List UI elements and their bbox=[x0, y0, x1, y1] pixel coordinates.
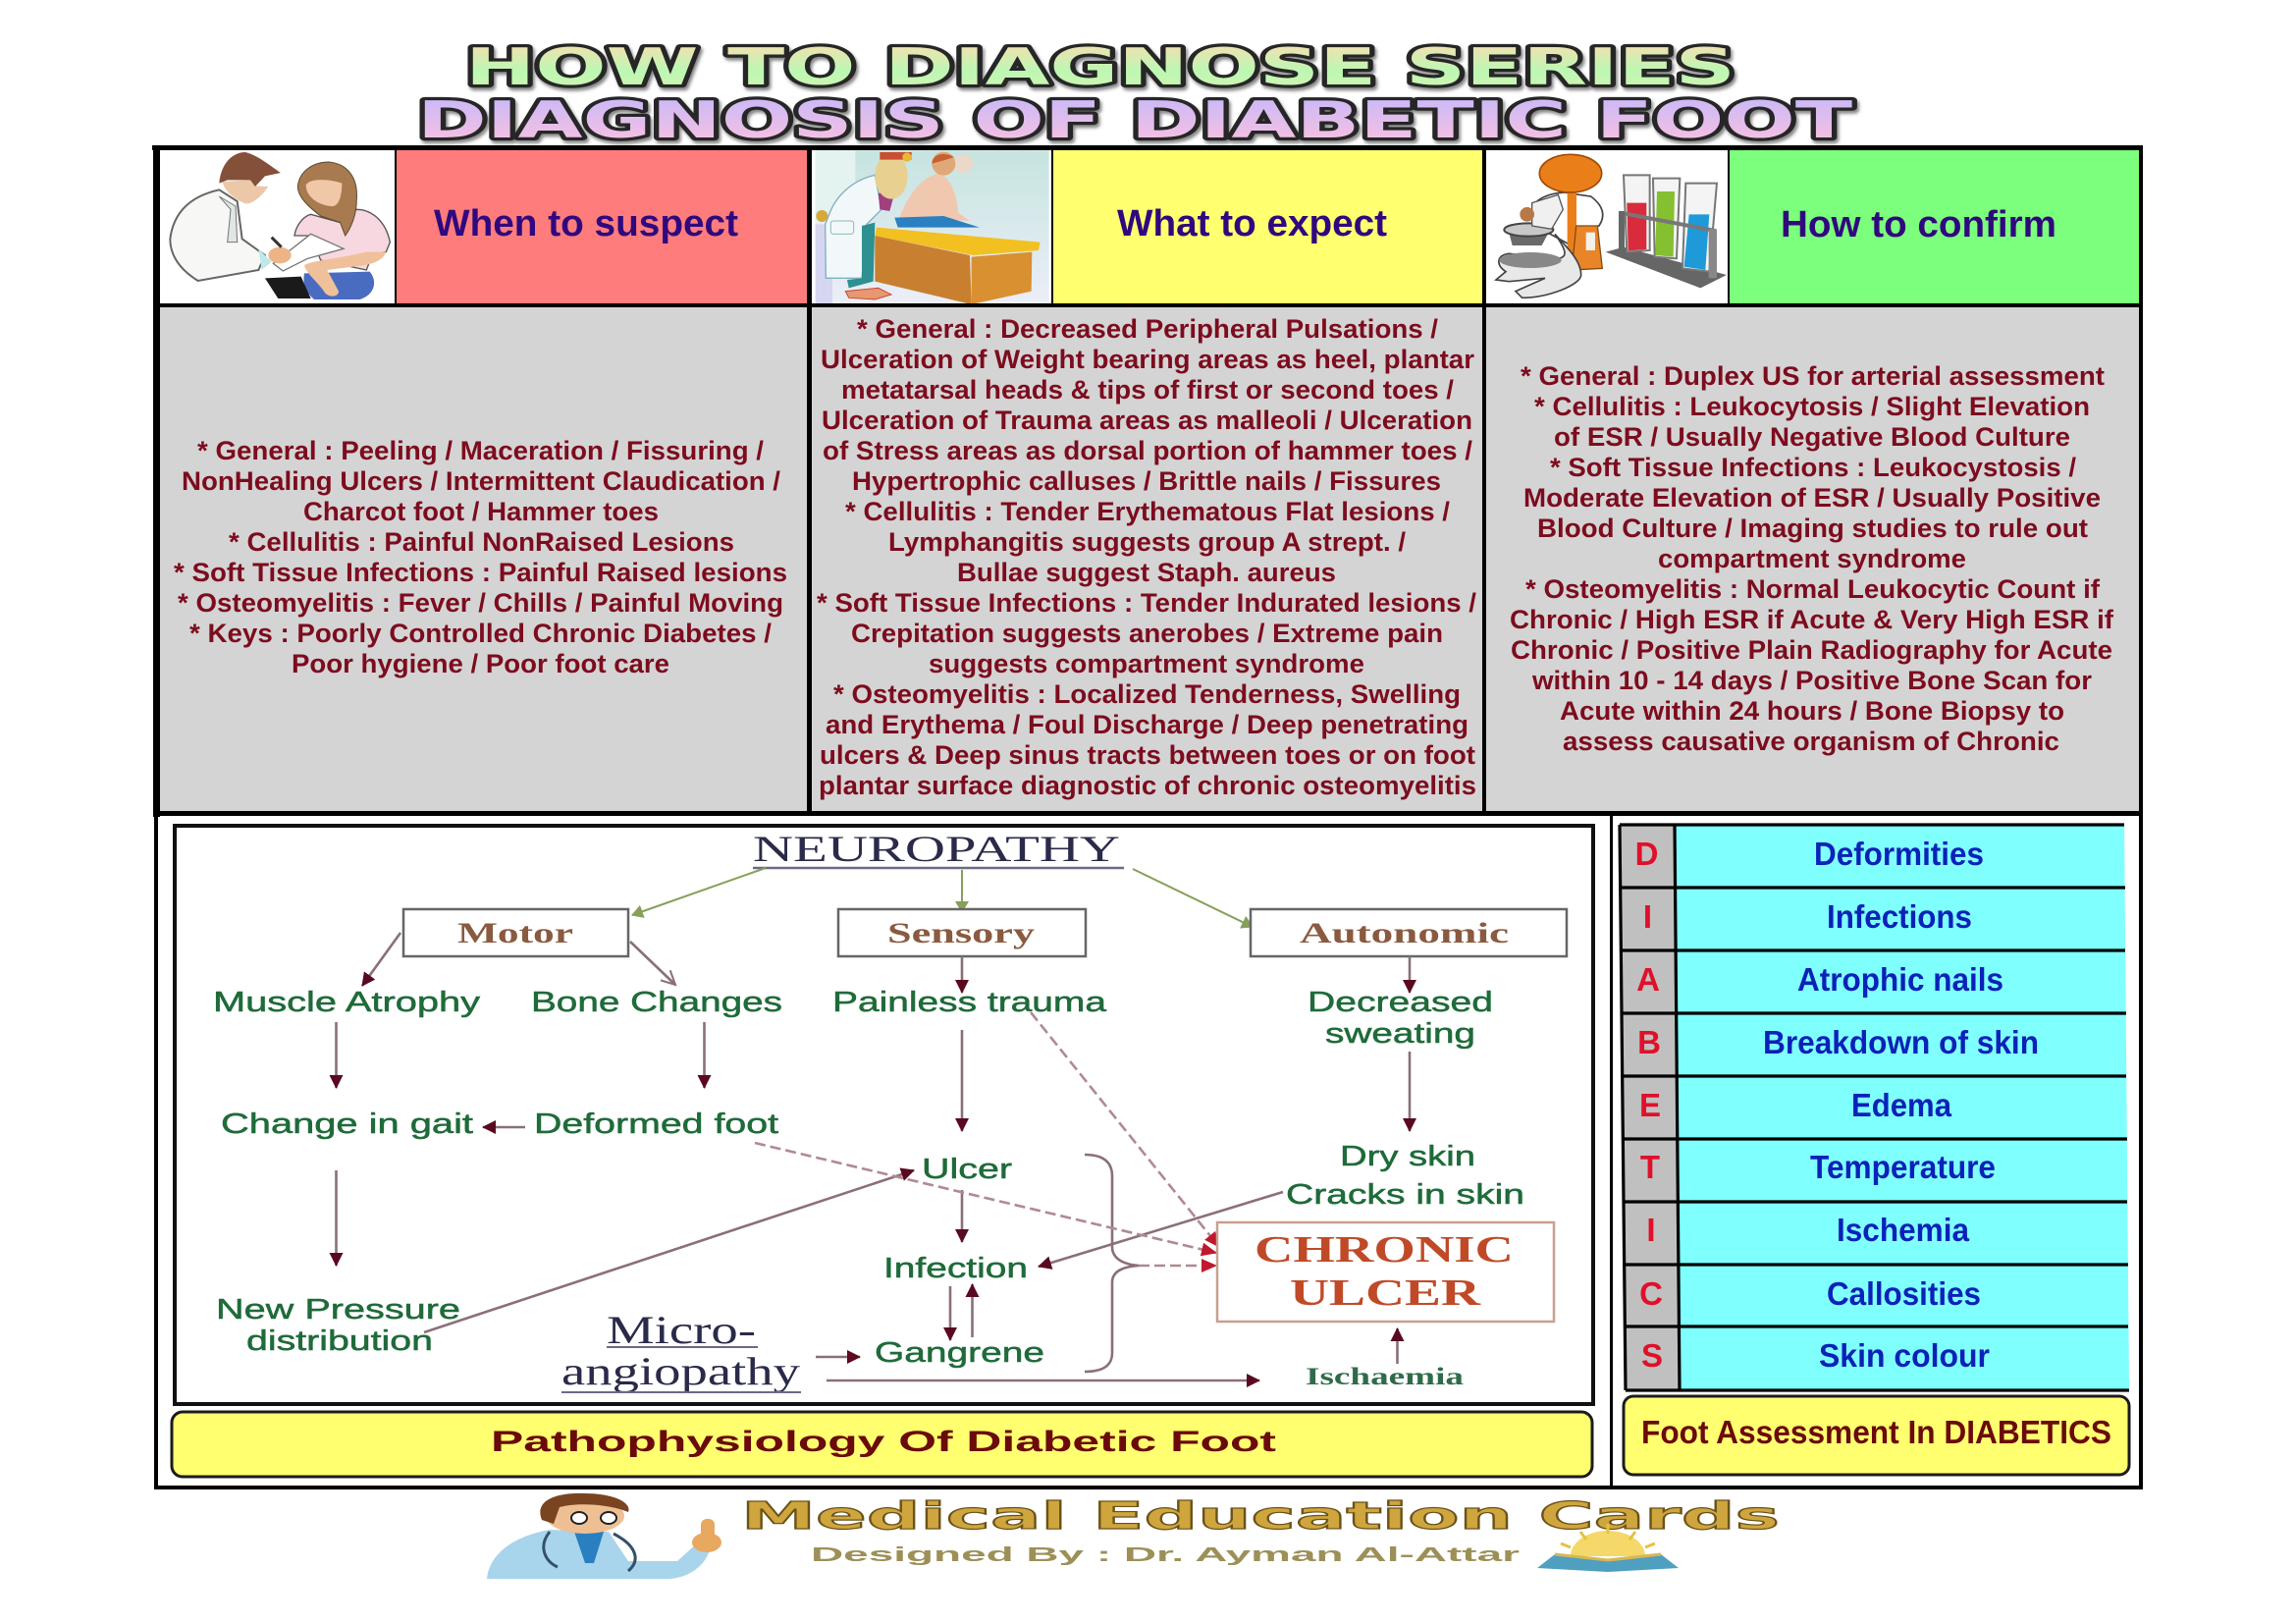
row: A atrophic nails: Atrophic nails bbox=[1797, 961, 2003, 998]
dashed arrows to chronic ulcer bbox=[755, 1012, 1219, 1266]
flow labels: Dry skin bbox=[1340, 1141, 1475, 1172]
flow labels: New Pressure bbox=[216, 1294, 460, 1325]
box: chronic ulcer: ULCER bbox=[1290, 1272, 1481, 1314]
text: how to confirm details: within 10 - 14 days / Positive Bone Scan for bbox=[1531, 666, 2092, 695]
text: what to expect details: plantar surface diagnostic of chronic osteomyelitis bbox=[819, 771, 1476, 800]
text: what to expect details: * General : Decreased Peripheral Pulsations / bbox=[857, 314, 1439, 344]
text: how to confirm details: Chronic / High ESR if Acute & Very High ESR if bbox=[1510, 605, 2113, 634]
caption: pathophysiology of diabetic foot: Pathophysiology Of Diabetic Foot bbox=[491, 1426, 1276, 1458]
text: when to suspect details: * Soft Tissue Infections : Painful Raised lesions bbox=[174, 558, 787, 587]
row: B breakdown of skin bbox=[1637, 1024, 2039, 1060]
row: D deformities: Deformities bbox=[1814, 836, 1984, 872]
text: when to suspect details: * Osteomyelitis : Fever / Chills / Painful Moving bbox=[178, 588, 783, 618]
text: what to expect details: and Erythema / Foul Discharge / Deep penetrating bbox=[826, 710, 1468, 739]
text: how to confirm details: * General : Duplex US for arterial assessment bbox=[1521, 361, 2105, 391]
panel: what to expect header bbox=[1053, 148, 1483, 305]
text: how to confirm details: Blood Culture / Imaging studies to rule out bbox=[1537, 514, 2088, 543]
row: D deformities bbox=[1635, 836, 1984, 872]
panel: diabetics mnemonic table bbox=[1620, 825, 2129, 1390]
panel: when to suspect header bbox=[397, 148, 808, 305]
flow labels: Painless trauma bbox=[832, 987, 1107, 1018]
text: when to suspect details: NonHealing Ulcers / Intermittent Claudication / bbox=[182, 466, 781, 496]
flow arrows bbox=[336, 933, 1410, 1380]
flow labels: Infection bbox=[883, 1253, 1028, 1284]
icon: scientist with microscope and test tubes bbox=[1489, 150, 1728, 304]
row: E edema: E bbox=[1639, 1087, 1661, 1123]
icon: doctor with patient bbox=[160, 150, 395, 303]
flow labels bbox=[213, 987, 1524, 1369]
table frame bbox=[152, 145, 2143, 1489]
flow labels: Decreased bbox=[1308, 987, 1493, 1018]
text: how to confirm details: Chronic / Positive Plain Radiography for Acute bbox=[1511, 635, 2112, 665]
row: S skin colour: Skin colour bbox=[1819, 1337, 1990, 1374]
box: autonomic bbox=[1251, 909, 1567, 956]
panel: how to confirm body bbox=[1486, 307, 2140, 811]
caption: pathophysiology of diabetic foot bbox=[172, 1412, 1592, 1477]
text: what to expect details: Hypertrophic calluses / Brittle nails / Fissures bbox=[852, 466, 1441, 496]
row: C callosities bbox=[1639, 1275, 1981, 1312]
text: how to confirm details: * Soft Tissue Infections : Leukocystosis / bbox=[1550, 453, 2077, 482]
text: when to suspect details: * Keys : Poorly Controlled Chronic Diabetes / bbox=[189, 619, 773, 648]
flow labels: Bone Changes bbox=[531, 987, 782, 1018]
icon: doctor examining patient bbox=[816, 150, 1049, 304]
text: when to suspect details: * General : Peeling / Maceration / Fissuring / bbox=[197, 436, 765, 465]
panel: what to expect body bbox=[812, 307, 1483, 811]
heading: neuropathy: NEUROPATHY bbox=[753, 830, 1120, 870]
text: how to confirm details: compartment syndrome bbox=[1658, 544, 1966, 573]
flow labels: Gangrene bbox=[875, 1337, 1044, 1369]
text: how to confirm details: assess causative organism of Chronic bbox=[1563, 727, 2059, 756]
panel: when to suspect body bbox=[160, 307, 808, 811]
title line 2: DIAGNOSIS OF DIABETIC FOOT bbox=[417, 91, 1853, 150]
text: how to confirm details: * Cellulitis : Leukocytosis / Slight Elevation bbox=[1534, 392, 2090, 421]
box: chronic ulcer: CHRONIC bbox=[1255, 1229, 1514, 1271]
icon: open book with sun bbox=[1537, 1524, 1679, 1572]
row: D deformities: D bbox=[1635, 836, 1658, 872]
panel: main table background bbox=[155, 147, 2141, 1487]
text: when to suspect details: Charcot foot / Hammer toes bbox=[303, 497, 659, 526]
row: A atrophic nails: A bbox=[1636, 961, 1660, 998]
box: sensory: Sensory bbox=[887, 917, 1035, 949]
text: how to confirm details: * Osteomyelitis : Normal Leukocytic Count if bbox=[1525, 574, 2100, 604]
row: I infections: Infections bbox=[1827, 898, 1972, 935]
label: microangiopathy: angiopathy bbox=[561, 1349, 800, 1393]
footer brand: medical education cards: Medical Education Cards bbox=[741, 1494, 1780, 1538]
text: what to expect details: ulcers & Deep sinus tracts between toes or on foot bbox=[820, 740, 1475, 770]
flow labels: Deformed foot bbox=[534, 1109, 778, 1140]
row: T temperature bbox=[1640, 1149, 1996, 1185]
text: what to expect details: Ulceration of Weight bearing areas as heel, plantar bbox=[821, 345, 1474, 374]
text: when to suspect details: Poor hygiene / Poor foot care bbox=[292, 649, 669, 678]
box: chronic ulcer bbox=[1217, 1222, 1554, 1322]
flow labels: sweating bbox=[1325, 1018, 1475, 1050]
panel: how to confirm header bbox=[1730, 148, 2140, 305]
caption: foot assessment in diabetics: Foot Assessment In DIABETICS bbox=[1641, 1414, 2111, 1450]
flow labels: distribution bbox=[246, 1325, 433, 1357]
row: B breakdown of skin: Breakdown of skin bbox=[1763, 1024, 2039, 1060]
row: I ischemia: I bbox=[1646, 1212, 1656, 1248]
text: what to expect details: * Osteomyelitis : Localized Tenderness, Swelling bbox=[833, 679, 1461, 709]
text: what to expect details: * Cellulitis : Tender Erythematous Flat lesions / bbox=[845, 497, 1451, 526]
footer credit: designer: Designed By : Dr. Ayman Al-Attar bbox=[811, 1544, 1520, 1566]
row: A atrophic nails bbox=[1636, 961, 2003, 998]
arrows: neuropathy branches bbox=[632, 868, 1253, 927]
text: what to expect details bbox=[817, 314, 1477, 800]
row: B breakdown of skin: B bbox=[1637, 1024, 1661, 1060]
row: T temperature: Temperature bbox=[1810, 1149, 1996, 1185]
icon: cartoon doctor bbox=[487, 1493, 721, 1579]
title bbox=[417, 38, 1853, 150]
label: ischaemia: Ischaemia bbox=[1306, 1364, 1465, 1390]
row: I ischemia bbox=[1646, 1212, 1970, 1248]
flow labels: Change in gait bbox=[221, 1109, 473, 1140]
flow labels: Muscle Atrophy bbox=[213, 987, 481, 1018]
text: what to expect details: Crepitation suggests anerobes / Extreme pain bbox=[851, 619, 1443, 648]
text: how to confirm details: Acute within 24 hours / Bone Biopsy to bbox=[1560, 696, 2064, 726]
row: C callosities: C bbox=[1639, 1275, 1663, 1312]
text: how to confirm details: Moderate Elevation of ESR / Usually Positive bbox=[1523, 483, 2101, 513]
box: motor: Motor bbox=[457, 917, 573, 949]
text: what to expect details: of Stress areas as dorsal portion of hammer toes / bbox=[823, 436, 1473, 465]
text: what to expect details: Ulceration of Trauma areas as malleoli / Ulceration bbox=[822, 406, 1472, 435]
row: S skin colour: S bbox=[1641, 1337, 1663, 1374]
row: S skin colour bbox=[1641, 1337, 1990, 1374]
text: what to expect details: Lymphangitis suggests group A strept. / bbox=[888, 527, 1407, 557]
row: T temperature: T bbox=[1640, 1149, 1660, 1185]
text: what to expect details: * Soft Tissue Infections : Tender Indurated lesions / bbox=[817, 588, 1477, 618]
text: what to expect details: suggests compartment syndrome bbox=[929, 649, 1364, 678]
row: I ischemia: Ischemia bbox=[1837, 1212, 1970, 1248]
caption: foot assessment in diabetics bbox=[1624, 1396, 2129, 1475]
label: microangiopathy: Micro- bbox=[607, 1308, 756, 1352]
flow labels: Ulcer bbox=[922, 1154, 1012, 1185]
panel: pathophysiology flowchart bbox=[175, 826, 1593, 1404]
row: E edema: Edema bbox=[1851, 1087, 1952, 1123]
row: C callosities: Callosities bbox=[1827, 1275, 1981, 1312]
label: microangiopathy bbox=[561, 1308, 801, 1393]
row: E edema bbox=[1639, 1087, 1952, 1123]
text: when to suspect details bbox=[174, 436, 787, 678]
box: motor bbox=[403, 909, 628, 956]
heading: when to suspect: When to suspect bbox=[434, 203, 738, 244]
flow labels: Cracks in skin bbox=[1286, 1179, 1524, 1211]
text: what to expect details: Bullae suggest Staph. aureus bbox=[957, 558, 1336, 587]
heading: what to expect: What to expect bbox=[1117, 203, 1387, 244]
box: sensory bbox=[838, 909, 1086, 956]
heading: how to confirm: How to confirm bbox=[1781, 204, 2056, 245]
text: when to suspect details: * Cellulitis : Painful NonRaised Lesions bbox=[229, 527, 734, 557]
text: how to confirm details: of ESR / Usually Negative Blood Culture bbox=[1554, 422, 2070, 452]
title line 1: HOW TO DIAGNOSE SERIES bbox=[465, 38, 1735, 97]
text: how to confirm details bbox=[1510, 361, 2113, 756]
text: what to expect details: metatarsal heads & tips of first or second toes / bbox=[841, 375, 1455, 405]
box: autonomic: Autonomic bbox=[1300, 917, 1509, 949]
row: I infections: I bbox=[1643, 898, 1652, 935]
row: I infections bbox=[1643, 898, 1972, 935]
